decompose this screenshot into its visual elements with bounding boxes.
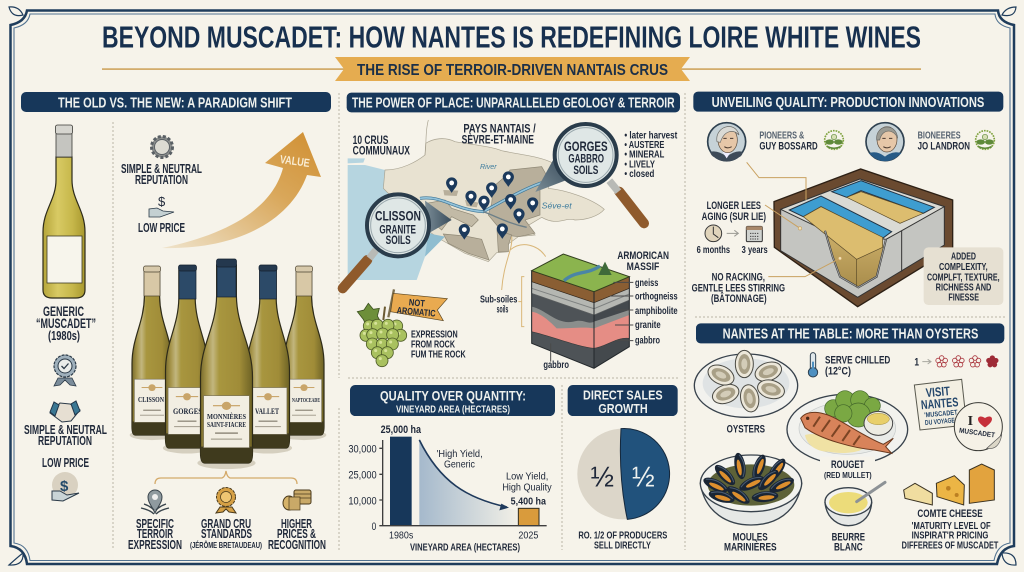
label: specific terroir expression: EXPRESSION xyxy=(128,537,182,552)
arrow: rising value: VALUE xyxy=(279,154,311,170)
pie chart: half of producers xyxy=(577,429,670,519)
chart: vineyard area: 25,000 xyxy=(348,470,377,482)
label: generic Muscadet xyxy=(36,304,96,343)
label: simple and neutral reputation: SIMPLE & NEUTRAL xyxy=(121,161,202,176)
label: six months and three years: 6 months xyxy=(697,245,730,256)
card: visit Nantes xyxy=(914,379,967,430)
label: simple and neutral reputation: REPUTATION xyxy=(38,433,92,448)
label: Jo Landron: JO LANDRON xyxy=(918,140,970,152)
list: wine character: • LIVELY xyxy=(624,159,655,170)
panel: food pairings xyxy=(694,323,1004,554)
label: specific terroir expression xyxy=(128,516,182,552)
chart: vineyard area: 2025 xyxy=(518,530,539,541)
labels: rock layers: orthogneiss xyxy=(635,292,678,303)
heading: direct sales growth: DIRECT SALES xyxy=(583,387,663,402)
chart: vineyard area: 5,400 ha xyxy=(511,496,546,507)
label: specific terroir expression: TERROIR xyxy=(137,526,173,541)
icon: low price hand xyxy=(149,194,174,217)
label: generic Muscadet: GENERIC xyxy=(43,304,84,319)
label: no racking xyxy=(692,271,785,305)
bottle: Clisson xyxy=(130,266,174,440)
illustration: oysters xyxy=(694,350,798,417)
label: low price: LOW PRICE xyxy=(42,455,89,470)
label: beurre blanc: BEURRE xyxy=(832,531,865,543)
label: producers sell directly: SELL DIRECTLY xyxy=(594,540,651,551)
label: generic Muscadet: “MUSCADET” xyxy=(36,316,96,331)
sticker: I love Muscadet: MUSCADET xyxy=(959,428,996,440)
map: Pays Nantais: Séve-et xyxy=(542,202,573,211)
list: wine character xyxy=(624,130,678,180)
callout: added complexity: COMPLEXITY, xyxy=(939,262,988,273)
card: visit Nantes: VISIT xyxy=(925,384,951,400)
magnifier: Gorges gabbro soils: GORGES xyxy=(564,138,608,154)
label: low price: LOW PRICE xyxy=(138,220,185,235)
magnifier: Gorges gabbro soils: SOILS xyxy=(573,163,598,177)
label: oysters: OYSTERS xyxy=(727,423,765,435)
icon: terroir pin xyxy=(141,490,169,514)
magnifier: Clisson granite soils xyxy=(343,194,452,288)
icon: hand with dollar: $ xyxy=(60,478,69,495)
panel: geology and terroir xyxy=(343,93,680,371)
sticker: I love Muscadet xyxy=(954,403,1002,451)
bottle: Naptoceade: NAPTOCEADE xyxy=(292,398,320,404)
heading: quality over quantity: VINEYARD AREA (HECTARES) xyxy=(396,405,510,416)
chart: vineyard area: 0 xyxy=(372,521,376,533)
pie chart: half of producers: ½ xyxy=(632,462,655,494)
heading: direct sales growth: GROWTH xyxy=(598,401,648,416)
label: beurre blanc xyxy=(832,531,865,554)
chart: vineyard area: 30,000 xyxy=(348,444,377,456)
label: grand cru standards xyxy=(190,516,262,550)
list: wine character: • closed xyxy=(624,169,654,180)
panel: old vs new xyxy=(21,92,331,552)
label: moules marinières: MOULES xyxy=(733,531,768,543)
heading: Nantes at the table xyxy=(696,323,1004,343)
panel: direct sales growth xyxy=(568,385,678,551)
callout: added complexity: COMPLFT, TEXTURE, xyxy=(927,272,1000,283)
icon: rosette xyxy=(54,355,76,386)
label: serve chilled: SERVE CHILLED xyxy=(825,354,890,366)
label: higher prices and recognition: PRICES & xyxy=(277,526,316,541)
bottle: Clisson: CLISSON xyxy=(138,396,164,404)
heading: direct sales growth xyxy=(568,385,678,416)
heading: old vs new xyxy=(21,92,331,112)
magnifier: Gorges gabbro soils xyxy=(535,124,644,223)
label: longer lees aging xyxy=(702,200,766,223)
label: rouget: (RED MULLET) xyxy=(824,470,872,480)
magnifier: Clisson granite soils: GRANITE xyxy=(379,222,416,236)
label: grand cru standards: (JÉRÔME BRETAUDEAU) xyxy=(190,539,262,550)
label: specific terroir expression: SPECIFIC xyxy=(136,516,174,531)
bottle: Gorges: GORGES xyxy=(173,407,202,416)
icon: organic emblem xyxy=(976,131,994,149)
illustration: beurre blanc xyxy=(825,482,885,526)
bottle: Naptoceade xyxy=(282,266,326,440)
label: Guy Bossard: GUY BOSSARD xyxy=(759,140,818,152)
bottle: Vallet: VALLET xyxy=(255,407,279,416)
bottle: Monnières Saint-Fiacre xyxy=(197,259,256,469)
magnifier: Gorges gabbro soils: GABBRO xyxy=(568,152,604,166)
heading: quality over quantity xyxy=(350,385,555,416)
illustration: mussel bowl xyxy=(700,452,802,525)
list: wine character: • later harvest xyxy=(624,130,678,141)
heading: old vs new: THE OLD VS. THE NEW: A PARADIGM SHIFT xyxy=(58,95,292,111)
label: comte cheese: COMTE CHEESE xyxy=(917,508,983,520)
label: longer lees aging: AGING (SUR LIE) xyxy=(702,211,766,223)
label: grand cru standards: STANDARDS xyxy=(201,526,252,541)
chart: vineyard area: Generic xyxy=(444,459,475,470)
bracket xyxy=(155,471,297,484)
illustration: rouget plate xyxy=(787,391,908,480)
arrow: rising value xyxy=(162,132,321,248)
label: rouget xyxy=(824,459,872,480)
chart: vineyard area: VINEYARD AREA (HECTARES) xyxy=(410,543,520,554)
label: producers sell directly: RO. 1/2 OF PRODUCERS xyxy=(578,531,667,542)
label: simple and neutral reputation xyxy=(121,161,202,187)
label: comte cheese: 'MATURITY LEVEL OF xyxy=(912,521,991,532)
icon: gear xyxy=(152,136,172,158)
heading: quality over quantity: QUALITY OVER QUANTITY: xyxy=(380,388,526,403)
bottle: Monnières Saint-Fiacre: MONNIÈRES xyxy=(207,411,246,421)
label: expression from rock: EXPRESSION xyxy=(411,330,458,341)
label: Guy Bossard: PIONEERS & xyxy=(759,131,804,142)
label: higher prices and recognition: HIGHER xyxy=(281,516,312,531)
label: longer lees aging: LONGER LEES xyxy=(707,200,761,212)
map: Pays Nantais: River xyxy=(480,162,497,171)
magnifier: Clisson granite soils: SOILS xyxy=(386,233,411,247)
label: no racking: (BÂTONNAGE) xyxy=(711,292,767,305)
callout: added complexity: FINESSE xyxy=(948,292,979,303)
card: visit Nantes: 'MUSCADET xyxy=(924,409,958,419)
chart: vineyard area: Low Yield, xyxy=(506,471,548,482)
label: comte cheese xyxy=(902,508,998,551)
chart: vineyard area xyxy=(348,424,552,554)
callout: added complexity: RICHNESS AND xyxy=(936,282,991,293)
labels: rock layers: granite xyxy=(635,320,661,331)
label: Jo Landron xyxy=(918,131,970,152)
icon: hand with dollar xyxy=(52,472,79,501)
icon: handshake xyxy=(50,401,80,422)
label: higher prices and recognition: RECOGNITION xyxy=(268,537,326,552)
illustration: cheeses xyxy=(904,464,994,505)
label: moules marinières: MARINIÈRES xyxy=(724,541,777,554)
label: Armorican Massif: ARMORICAN xyxy=(617,250,669,262)
icon: low price hand: $ xyxy=(158,194,166,209)
flag: not aromatic: AROMATIC xyxy=(396,305,436,319)
heading: power of place: THE POWER OF PLACE: UNPARALLELED GEOLOGY & TERROIR xyxy=(352,96,675,112)
labels: rock layers: gabbro xyxy=(543,360,569,371)
sticker: I love Muscadet: I xyxy=(968,414,973,429)
bottle: Gorges xyxy=(163,265,211,453)
portrait: Guy Bossard xyxy=(708,123,746,162)
block diagram: Armorican Massif layers xyxy=(518,254,633,368)
icon: coins xyxy=(283,490,311,510)
labels: rock layers: Sub-soiles xyxy=(480,294,518,305)
label: beurre blanc: BLANC xyxy=(834,542,863,554)
chart: vineyard area: 'High Yield, xyxy=(437,449,483,460)
label: Pays Nantais: PAYS NANTAIS / xyxy=(463,121,536,135)
card: visit Nantes: NANTES xyxy=(920,395,959,412)
label: no racking: GENTLE LEES STIRRING xyxy=(692,282,785,294)
generic Muscadet bottle xyxy=(43,125,85,298)
flag: not aromatic xyxy=(388,289,447,321)
label: grand cru standards: GRAND CRU xyxy=(201,516,251,531)
label: moules marinières xyxy=(724,531,777,554)
illustration: underground vat xyxy=(774,169,953,307)
label: generic Muscadet: (1980s) xyxy=(48,328,80,343)
label: six months and three years: 3 years xyxy=(742,245,768,256)
labels: rock layers: gneiss xyxy=(635,278,659,289)
icon: organic emblem xyxy=(825,131,843,149)
icon: clock to calendar xyxy=(705,225,762,242)
icon: thermometer xyxy=(808,353,818,377)
chart: vineyard area: 10,000 xyxy=(348,495,377,507)
label: comte cheese: INSPIRAT'R PRICING xyxy=(912,531,989,542)
bottle: Vallet xyxy=(244,265,292,453)
portrait: Jo Landron xyxy=(866,123,904,161)
labels: rock layers: amphibolite xyxy=(635,306,678,317)
panel: quality over quantity chart xyxy=(348,385,555,554)
labels: rock layers: soils xyxy=(497,305,509,316)
five cru bottles xyxy=(130,259,326,469)
labels: rock layers: gabbro xyxy=(635,335,660,346)
list: wine character: • MINERAL xyxy=(624,150,664,161)
label: expression from rock xyxy=(411,330,466,360)
rating: one to four flowers: 1 xyxy=(914,356,919,368)
icon: grapes xyxy=(357,303,407,367)
subtitle ribbon xyxy=(102,57,921,81)
rating: one to four flowers xyxy=(914,355,998,368)
panel: production innovations xyxy=(692,92,1003,307)
callout: added complexity xyxy=(924,247,1003,305)
label: six months and three years xyxy=(697,245,768,256)
map: Pays Nantais xyxy=(348,120,604,290)
label: higher prices and recognition xyxy=(268,516,326,552)
label: Armorican Massif: MASSIF xyxy=(627,261,660,273)
chart: vineyard area: High Quality xyxy=(502,482,552,493)
label: 10 crus communaux: 10 CRUS xyxy=(353,133,388,147)
label: Guy Bossard xyxy=(759,131,818,152)
magnifier: Clisson granite soils: CLISSON xyxy=(375,208,421,224)
icon: grand cru rosette xyxy=(216,488,236,513)
bottle: Monnières Saint-Fiacre: SAINT-FIACRE xyxy=(207,420,246,429)
label: simple and neutral reputation: REPUTATION xyxy=(135,172,188,187)
label: Jo Landron: BIONEERES xyxy=(918,131,961,142)
label: serve chilled: (12°C) xyxy=(825,366,851,378)
label: serve chilled xyxy=(825,354,890,378)
label: expression from rock: FUM THE ROCK xyxy=(411,349,466,360)
label: Armorican Massif xyxy=(617,250,669,273)
chart: vineyard area: 1980s xyxy=(389,530,413,541)
card: visit Nantes: DU VOYAGE xyxy=(925,417,955,427)
subtitle ribbon: THE RISE OF TERROIR-DRIVEN NANTAIS CRUS xyxy=(357,62,668,79)
label: Pays Nantais: SÈVRE-ET-MAINE xyxy=(462,131,534,146)
label: simple and neutral reputation: SIMPLE & NEUTRAL xyxy=(24,422,107,437)
flag: not aromatic: NOT xyxy=(408,297,426,309)
label: 10 crus communaux xyxy=(353,133,410,158)
label: 10 crus communaux: COMMUNAUX xyxy=(353,144,410,158)
label: rouget: ROUGET xyxy=(831,459,865,471)
label: expression from rock: FROM ROCK xyxy=(411,340,456,351)
callout: added complexity: ADDED xyxy=(951,252,976,263)
label: producers sell directly xyxy=(578,531,667,551)
labels: rock layers xyxy=(480,278,678,371)
label: no racking: NO RACKING, xyxy=(712,271,765,283)
pie chart: half of producers: ½ xyxy=(591,462,614,494)
list: wine character: • AUSTERE xyxy=(624,140,665,151)
label: Pays Nantais xyxy=(462,121,536,146)
heading: power of place xyxy=(347,93,680,112)
chart: vineyard area: 25,000 ha xyxy=(381,424,421,436)
label: simple and neutral reputation xyxy=(24,422,107,448)
